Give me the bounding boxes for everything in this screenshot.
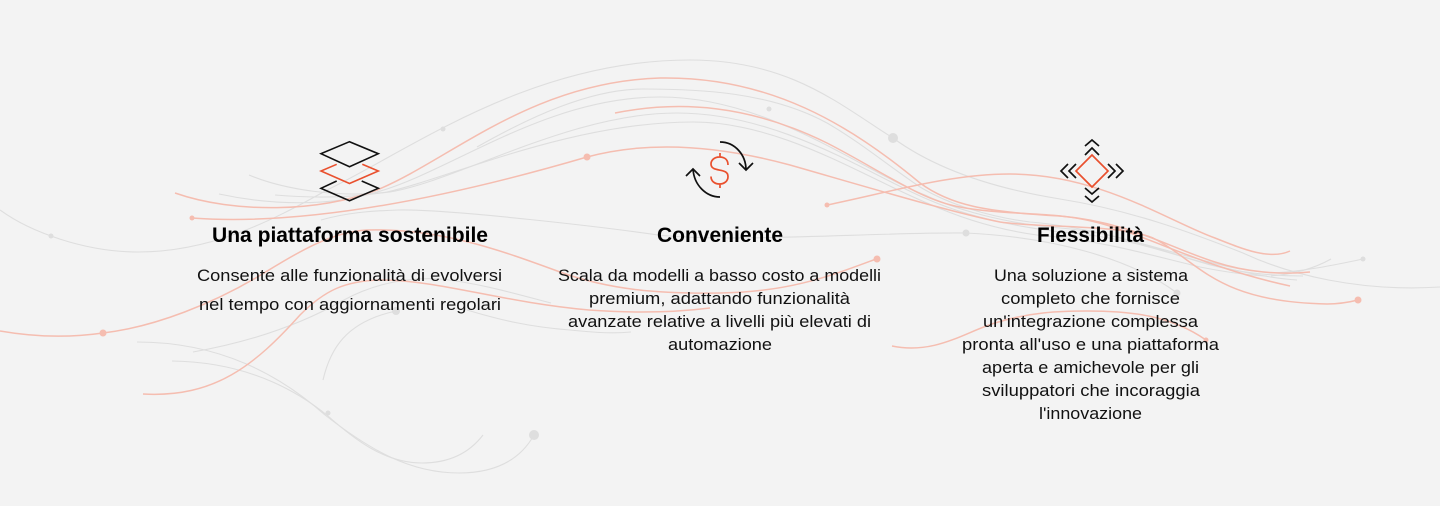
heading: Una piattaforma sostenibile [212, 224, 488, 247]
text block [962, 266, 1220, 423]
text block: l'innovazione [1039, 404, 1142, 423]
panel: piattaforma sostenibile [197, 142, 502, 314]
text block: Una soluzione a sistema [994, 266, 1189, 285]
icon: dollar with cycle arrows [686, 142, 753, 197]
text block: premium, adattando funzionalità [589, 289, 851, 308]
panel: conveniente [558, 142, 881, 354]
background flowing salmon lines [0, 78, 1362, 394]
icon: stacked layers [321, 142, 378, 201]
heading: Flessibilità [1037, 224, 1144, 247]
text block: Consente alle funzionalità di evolversi [197, 266, 502, 285]
text block: Scala da modelli a basso costo a modelli [558, 266, 881, 285]
icon: diamond with directional chevrons [1061, 140, 1123, 202]
text block: pronta all'uso e una piattaforma [962, 335, 1220, 354]
text block: nel tempo con aggiornamenti regolari [199, 295, 501, 314]
text block: un'integrazione complessa [983, 312, 1199, 331]
heading: Conveniente [657, 224, 783, 247]
text block [558, 266, 881, 354]
panel: flessibilità [962, 140, 1220, 423]
text block: completo che fornisce [1001, 289, 1180, 308]
text block [197, 266, 502, 314]
text block: sviluppatori che incoraggia [982, 381, 1201, 400]
text block: aperta e amichevole per gli [982, 358, 1199, 377]
text block: automazione [668, 335, 772, 354]
text block: avanzate relative a livelli più elevati di [568, 312, 871, 331]
